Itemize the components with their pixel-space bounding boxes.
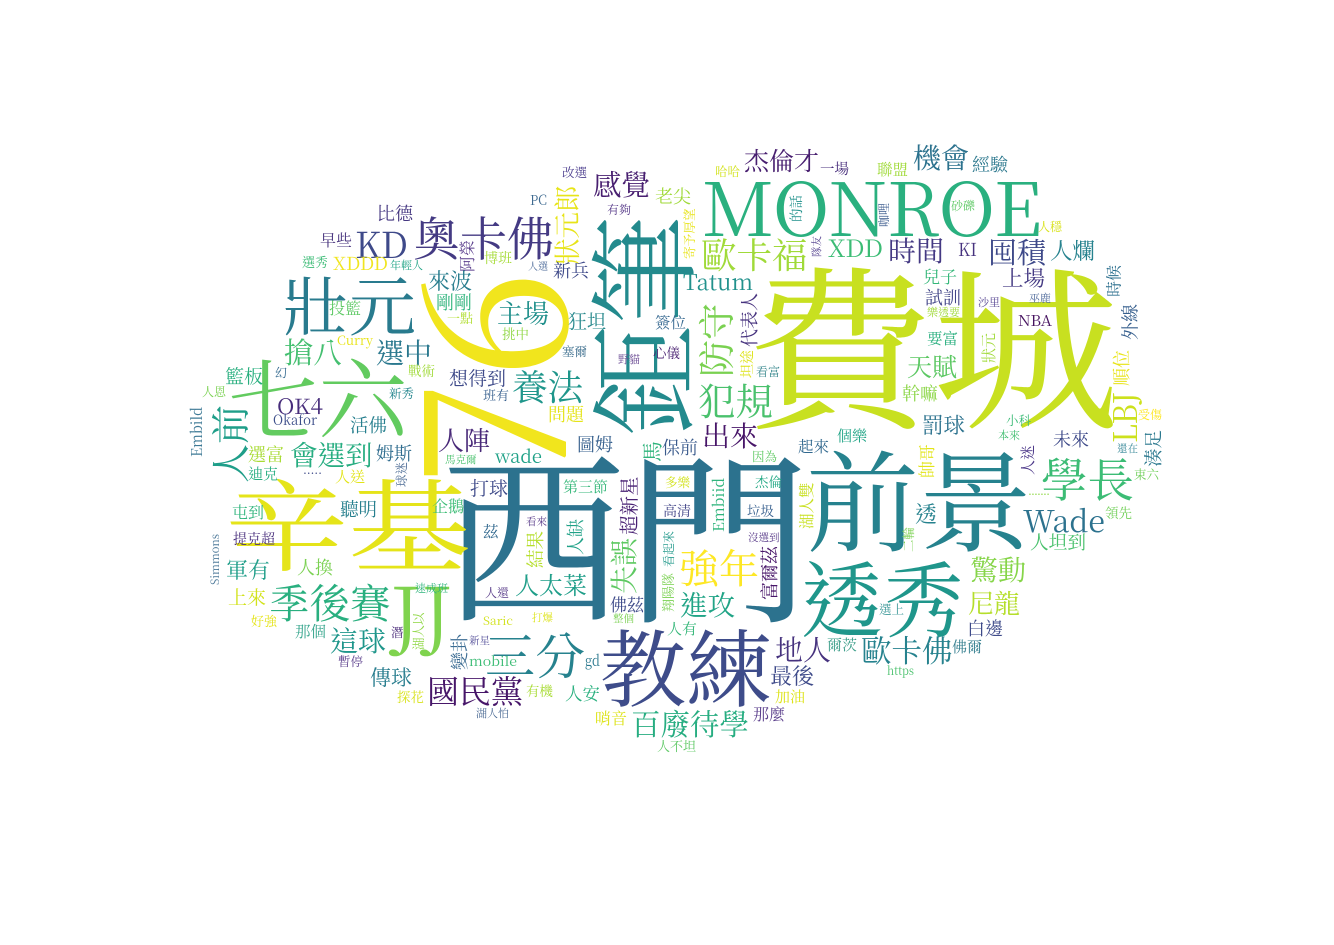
養法: 養法 (512, 360, 584, 411)
會選到: 會選到 (290, 433, 372, 473)
隊友: 隊友 (809, 236, 824, 257)
哨音: 哨音 (595, 706, 627, 729)
人安: 人安 (565, 681, 600, 706)
企鵝: 企鵝 (432, 494, 464, 517)
人恩: 人恩 (202, 383, 227, 400)
LBJ: LBJ (1100, 392, 1147, 443)
OK4: OK4 (277, 391, 323, 421)
富爾茲: 富爾茲 (756, 545, 782, 600)
探花: 探花 (397, 686, 424, 706)
佛爾: 佛爾 (952, 636, 982, 657)
人選: 人選 (528, 258, 549, 273)
兒子: 兒子 (923, 263, 957, 288)
Embild: Embild (186, 406, 207, 457)
杰倫: 杰倫 (755, 471, 782, 491)
比德: 比德 (377, 200, 414, 226)
湖人以: 湖人以 (409, 612, 427, 650)
辛基: 辛基 (225, 448, 471, 592)
好強: 好強 (251, 611, 278, 630)
本來: 本來 (998, 427, 1020, 443)
博班: 博班 (484, 248, 512, 268)
咖哩: 咖哩 (875, 203, 892, 227)
湊足: 湊足 (1140, 430, 1166, 467)
Embiid: Embiid (708, 477, 729, 532)
狀元郎: 狀元郎 (546, 186, 585, 265)
翔陽隊: 翔陽隊 (658, 573, 677, 612)
人太菜: 人太菜 (515, 566, 587, 601)
三分: 三分 (485, 617, 585, 689)
人缺: 人缺 (562, 519, 588, 555)
姆斯: 姆斯 (376, 440, 412, 466)
心儀: 心儀 (653, 342, 680, 362)
Saric: Saric (483, 613, 513, 629)
垃圾: 垃圾 (747, 500, 774, 520)
76: 76 (342, 270, 622, 486)
人送: 人送 (335, 466, 365, 487)
人有: 人有 (667, 618, 697, 639)
選秀: 選秀 (302, 252, 328, 271)
馬: 馬 (637, 441, 667, 462)
上來: 上來 (228, 583, 266, 610)
來波: 來波 (428, 265, 472, 296)
那麼: 那麼 (753, 702, 785, 725)
挑中: 挑中 (502, 323, 529, 343)
XDDD: XDDD (333, 250, 388, 276)
哈哈: 哈哈 (715, 162, 741, 180)
超新星: 超新星 (614, 476, 642, 535)
最後: 最後 (770, 660, 814, 691)
巫鹿: 巫鹿 (1029, 290, 1051, 306)
有機: 有機 (526, 680, 554, 700)
PC: PC (530, 190, 547, 210)
傳球: 傳球 (370, 662, 412, 692)
尼龍: 尼龍 (968, 584, 1020, 621)
經驗: 經驗 (972, 151, 1009, 177)
犯規: 犯規 (698, 372, 773, 426)
Okafor: Okafor (273, 410, 317, 430)
罰球: 罰球 (922, 409, 965, 440)
改選: 改選 (562, 163, 588, 181)
地人: 地人 (775, 629, 831, 669)
整個: 整個 (613, 611, 634, 626)
潛: 潛 (391, 623, 404, 641)
人陣: 人陣 (438, 421, 490, 458)
塞爾: 塞爾 (562, 342, 588, 360)
變卦: 變卦 (446, 633, 472, 671)
壯元: 壯元 (282, 255, 416, 349)
人坦到: 人坦到 (1030, 528, 1086, 555)
新秀: 新秀 (389, 384, 415, 402)
那個: 那個 (295, 620, 326, 642)
高清: 高清 (663, 501, 691, 521)
佛茲: 佛茲 (610, 591, 645, 616)
杰倫才: 杰倫才 (744, 142, 819, 178)
JJ: JJ (388, 553, 452, 668)
XDD: XDD (828, 229, 883, 264)
提克超: 提克超 (233, 529, 275, 549)
多樂: 多樂 (665, 473, 691, 491)
想得到: 想得到 (449, 364, 506, 391)
mobile: mobile (469, 651, 517, 670)
幹嘛: 幹嘛 (902, 380, 938, 406)
https: https (887, 662, 914, 679)
坦途: 坦途 (737, 349, 757, 378)
人爛: 人爛 (1050, 234, 1095, 266)
個樂: 個樂 (837, 425, 868, 446)
活佛: 活佛 (350, 412, 387, 438)
要富: 要富 (927, 327, 958, 349)
wade: wade (494, 443, 542, 469)
學長: 學長 (1041, 444, 1134, 511)
歐卡福: 歐卡福 (701, 228, 808, 279)
時間: 時間 (888, 230, 944, 270)
選上: 選上 (879, 600, 904, 618)
加油: 加油 (775, 686, 805, 707)
時候: 時候 (1102, 265, 1124, 297)
圖姆: 圖姆 (577, 431, 613, 457)
選富: 選富 (248, 441, 284, 467)
新星: 新星 (469, 633, 490, 648)
帥哥: 帥哥 (913, 444, 938, 478)
起來: 起來 (798, 435, 829, 457)
軍有: 軍有 (226, 554, 270, 585)
機會: 機會 (913, 137, 969, 177)
寄予厚望: 寄予厚望 (679, 208, 698, 259)
搶八: 搶八 (284, 331, 342, 372)
籃板: 籃板 (225, 362, 263, 389)
感覺: 感覺 (593, 163, 650, 204)
出來: 出來 (702, 415, 758, 455)
馬克爾: 馬克爾 (445, 452, 477, 467)
外線: 外線 (1116, 304, 1142, 340)
屯到: 屯到 (232, 500, 264, 523)
阿榮: 阿榮 (455, 240, 478, 272)
二輪: 二輪 (899, 527, 917, 552)
上場: 上場 (1002, 262, 1045, 293)
還在: 還在 (1117, 441, 1138, 456)
gd: gd (585, 650, 600, 671)
爾茨: 爾茨 (827, 634, 857, 655)
狀元: 狀元 (978, 333, 999, 363)
Curry: Curry (337, 330, 374, 349)
囤積: 囤積 (988, 231, 1048, 272)
代表人: 代表人 (736, 293, 762, 347)
班有: 班有 (483, 385, 509, 404)
暫停: 暫停 (338, 652, 364, 670)
保前: 保前 (662, 434, 698, 460)
第三節: 第三節 (563, 476, 608, 497)
有夠: 有夠 (607, 201, 631, 218)
看起來: 看起來 (660, 531, 677, 567)
天賦: 天賦 (907, 348, 958, 384)
費城: 費城 (746, 213, 1119, 466)
聽明: 聽明 (340, 496, 377, 522)
西門: 西門 (441, 395, 811, 661)
戰術: 戰術 (408, 360, 435, 380)
dots: ..... (303, 461, 322, 478)
七六: 七六 (228, 332, 409, 458)
樂透要: 樂透要 (927, 304, 960, 320)
未來: 未來 (1053, 426, 1089, 452)
季後賽: 季後賽 (269, 571, 392, 630)
MONROE: MONROE (702, 152, 1042, 258)
鉅筆: 鉅筆 (559, 215, 717, 435)
百廢待學: 百廢待學 (631, 702, 749, 744)
因為: 因為 (752, 447, 778, 465)
早些: 早些 (320, 228, 352, 251)
打球: 打球 (470, 474, 508, 501)
dots: ....... (1028, 482, 1050, 499)
沙里: 沙里 (978, 294, 1000, 310)
湖人怕: 湖人怕 (476, 705, 509, 721)
老尖: 老尖 (655, 183, 691, 209)
Tatum: Tatum (683, 266, 753, 297)
的話: 的話 (785, 195, 805, 222)
驚動: 驚動 (970, 549, 1026, 589)
KD: KD (355, 218, 408, 269)
新兵: 新兵 (553, 257, 589, 283)
茲: 茲 (483, 520, 499, 542)
打爆: 打爆 (532, 610, 553, 625)
結果: 結果 (522, 531, 548, 568)
失誤: 失誤 (603, 537, 643, 594)
奧卡佛: 奧卡佛 (413, 203, 554, 270)
湖人雙: 湖人雙 (795, 482, 817, 529)
教練: 教練 (600, 604, 772, 725)
簽位: 簽位 (655, 311, 686, 333)
防守: 防守 (687, 303, 741, 377)
沒選到: 沒選到 (748, 530, 780, 545)
領先: 領先 (1105, 502, 1132, 522)
一點: 一點 (447, 308, 473, 327)
試訓: 試訓 (925, 284, 961, 310)
迪克: 迪克 (248, 463, 278, 484)
前景: 前景 (806, 417, 1032, 575)
狂坦: 狂坦 (568, 307, 606, 334)
砂礫: 砂礫 (951, 197, 975, 214)
人不坦: 人不坦 (657, 736, 696, 755)
看富: 看富 (756, 363, 780, 380)
主場: 主場 (497, 294, 549, 331)
透: 透 (915, 498, 937, 529)
看來: 看來 (526, 514, 547, 529)
國民黨: 國民黨 (427, 667, 523, 713)
人前: 人前 (201, 405, 257, 483)
KI: KI (958, 236, 977, 262)
人迷: 人迷 (1017, 445, 1038, 475)
問題: 問題 (548, 401, 585, 427)
透秀: 透秀 (801, 537, 965, 654)
Wade: Wade (1023, 497, 1105, 541)
球迷: 球迷 (392, 461, 410, 487)
順位: 順位 (1108, 350, 1134, 386)
野貓: 野貓 (618, 351, 640, 367)
投籃: 投籃 (329, 296, 361, 319)
人換: 人換 (297, 554, 333, 580)
人還: 人還 (485, 584, 509, 601)
小科: 小科 (1006, 411, 1032, 429)
白邊: 白邊 (967, 615, 1003, 641)
聯盟: 聯盟 (877, 158, 908, 180)
幻: 幻 (275, 364, 287, 381)
NBA: NBA (1018, 310, 1052, 331)
受傷: 受傷 (1138, 406, 1162, 423)
速成班: 速成班 (415, 580, 448, 596)
選中: 選中 (376, 332, 432, 372)
束六: 束六 (1134, 465, 1160, 483)
這球: 這球 (330, 620, 386, 660)
歐卡佛: 歐卡佛 (861, 627, 952, 671)
進攻: 進攻 (680, 583, 735, 623)
年輕人: 年輕人 (390, 257, 423, 273)
一場: 一場 (820, 158, 849, 179)
Simmons: Simmons (207, 534, 223, 585)
剛剛: 剛剛 (436, 289, 472, 315)
人穩: 人穩 (1038, 218, 1063, 235)
強年: 強年 (679, 538, 759, 595)
